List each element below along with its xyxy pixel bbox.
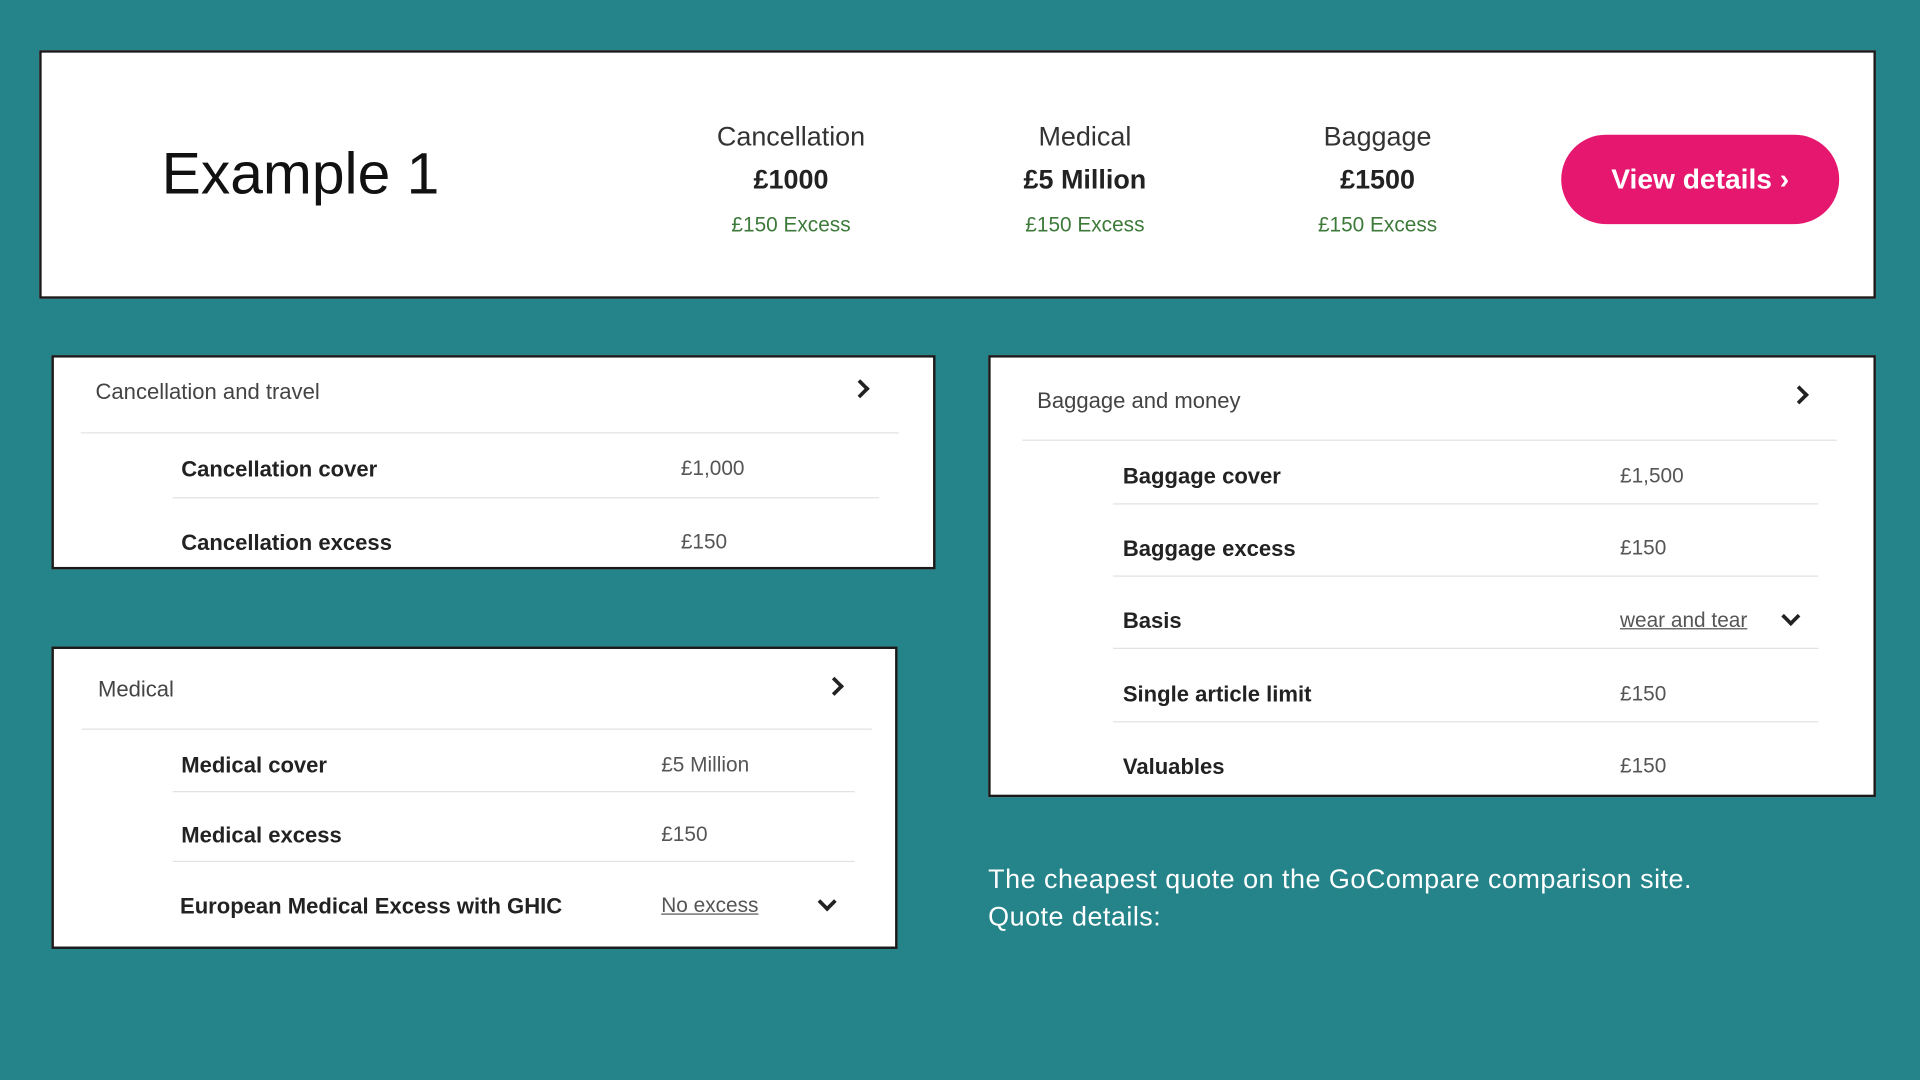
row: medical excess: £150 xyxy=(661,823,708,846)
caption text xyxy=(988,863,1692,932)
row: european medical excess: European Medical Excess with GHIC xyxy=(180,894,562,918)
button: view details xyxy=(1561,135,1839,224)
panel: baggage and money xyxy=(988,355,1876,797)
row: cancellation cover: Cancellation cover xyxy=(181,457,377,481)
column: medical xyxy=(1024,121,1146,236)
column: cancellation: £150 Excess xyxy=(731,213,851,236)
row: medical excess: Medical excess xyxy=(181,823,342,847)
row: valuables xyxy=(1123,754,1666,779)
header: Medical xyxy=(98,677,174,702)
column: baggage: £150 Excess xyxy=(1318,213,1437,236)
row: single article limit xyxy=(1123,682,1666,707)
panel: medical xyxy=(51,647,898,949)
row: cancellation excess: £150 xyxy=(681,530,727,553)
row: cancellation cover: £1,000 xyxy=(681,457,744,480)
column: medical: Medical xyxy=(1038,121,1131,152)
row: basis: Basis xyxy=(1123,609,1182,633)
row: baggage excess: £150 xyxy=(1620,536,1666,560)
column: cancellation: £1000 xyxy=(754,164,828,195)
row: cancellation excess xyxy=(181,530,727,555)
column: baggage: £1500 xyxy=(1340,164,1415,195)
row: baggage excess: Baggage excess xyxy=(1123,536,1296,561)
row: medical cover: Medical cover xyxy=(181,753,327,778)
row: basis xyxy=(1123,609,1800,633)
row: medical cover: £5 Million xyxy=(661,753,749,776)
row: european medical excess: No excess xyxy=(661,894,758,917)
row: cancellation excess: Cancellation excess xyxy=(181,530,392,555)
header: Cancellation and travel xyxy=(96,380,320,404)
row: baggage cover: £1,500 xyxy=(1620,464,1684,487)
row: single article limit: Single article limit xyxy=(1123,682,1311,707)
caption text: Quote details: xyxy=(988,901,1161,932)
column: cancellation xyxy=(717,121,865,236)
title: Example 1 xyxy=(162,142,439,207)
row: valuables: £150 xyxy=(1620,754,1666,778)
caption text: The cheapest quote on the GoCompare comparison site. xyxy=(988,863,1692,894)
panel: cancellation and travel xyxy=(51,355,936,569)
row: single article limit: £150 xyxy=(1620,682,1666,705)
row: medical excess xyxy=(181,823,708,847)
header: Baggage and money xyxy=(1037,388,1241,413)
row: medical cover xyxy=(181,753,749,778)
column: medical: £150 Excess xyxy=(1025,213,1144,236)
icon: chevron xyxy=(1790,385,1809,404)
column: baggage: Baggage xyxy=(1324,121,1431,152)
row: baggage cover xyxy=(1123,464,1684,489)
row: basis: wear and tear xyxy=(1620,609,1747,632)
column: baggage xyxy=(1318,121,1437,236)
icon: chevron xyxy=(825,677,844,696)
panel: summary xyxy=(39,50,1876,299)
column: cancellation: Cancellation xyxy=(717,121,865,152)
row: baggage cover: Baggage cover xyxy=(1123,464,1281,489)
row: cancellation cover xyxy=(181,457,744,481)
button: view details: View details › xyxy=(1611,163,1789,195)
row: valuables: Valuables xyxy=(1123,754,1225,779)
row: european medical excess xyxy=(180,894,837,918)
row: baggage excess xyxy=(1123,536,1666,561)
icon: chevron xyxy=(851,379,870,398)
column: medical: £5 Million xyxy=(1024,164,1146,195)
